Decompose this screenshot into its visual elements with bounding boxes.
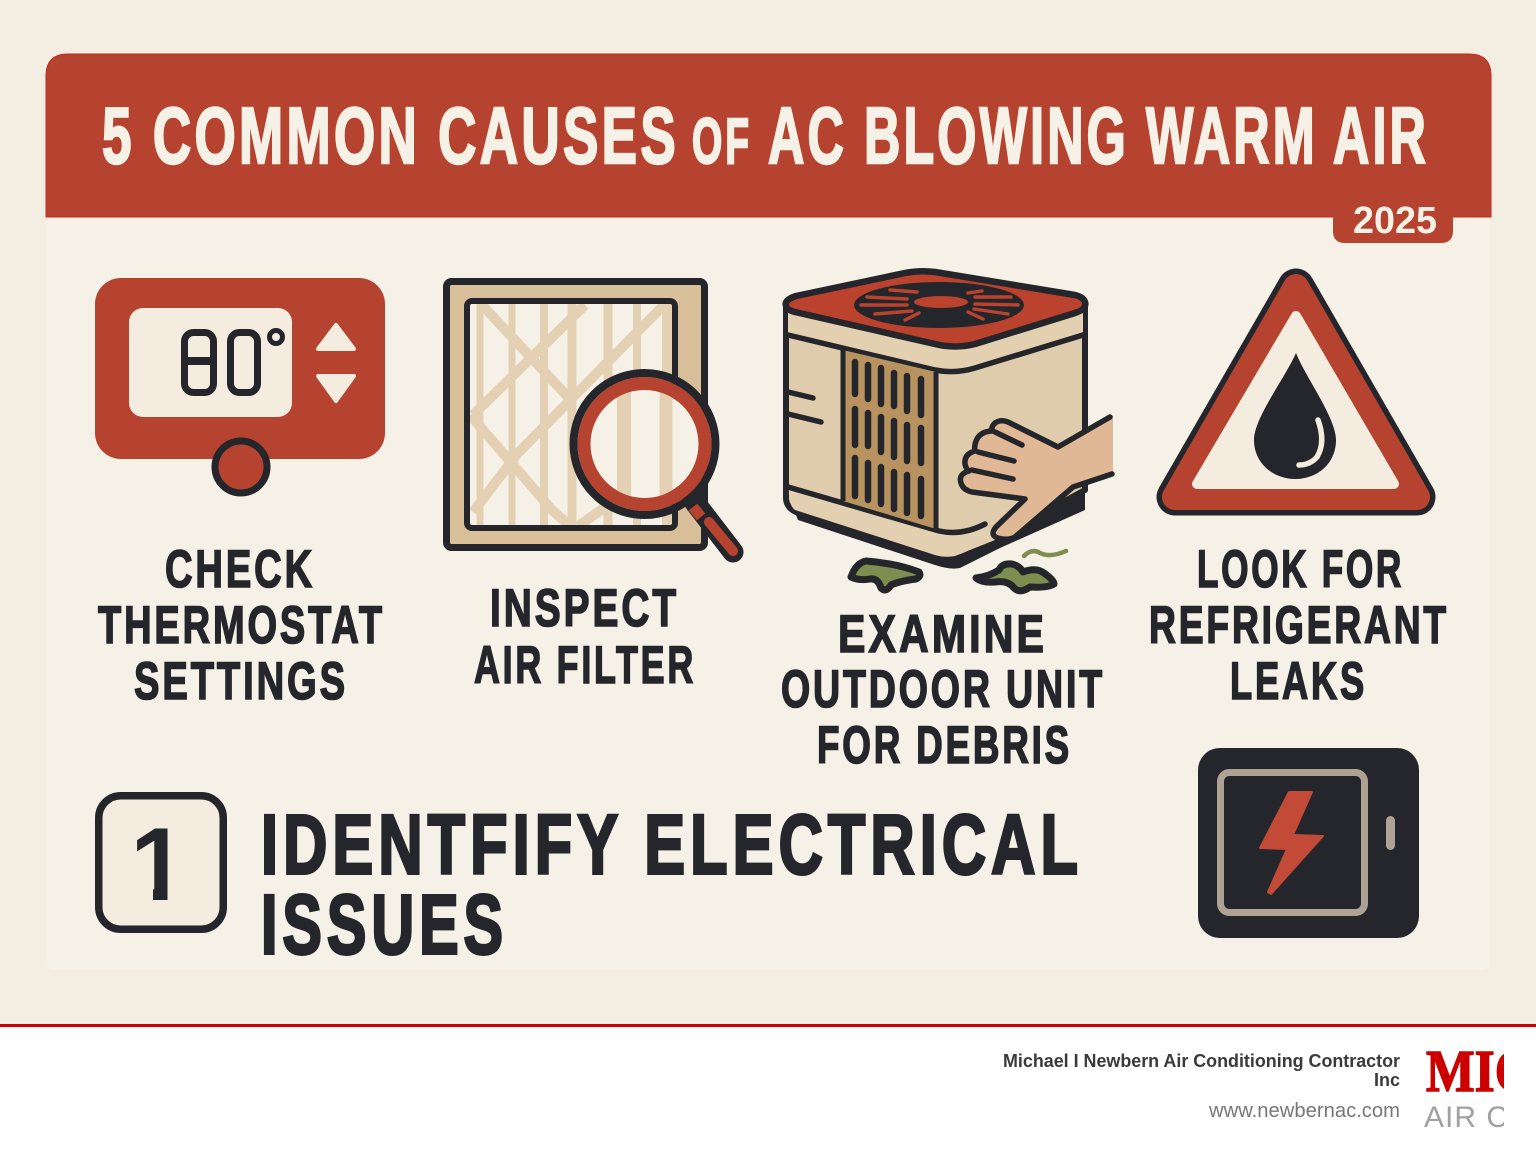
company name: Inc	[1374, 1069, 1400, 1090]
icon: outdoor AC unit with hand and debris	[786, 271, 1113, 591]
icon: electrical panel	[1198, 748, 1419, 938]
top	[786, 271, 1085, 346]
label: examine outdoor unit: EXAMINE	[838, 605, 1047, 664]
title	[102, 91, 1429, 180]
icon: thermostat	[95, 278, 385, 493]
label: check thermostat	[98, 540, 385, 711]
company name	[1003, 1050, 1400, 1090]
logo: AIR C	[1424, 1101, 1509, 1134]
heading: identify electrical issues	[261, 798, 1083, 972]
hand	[960, 416, 1113, 539]
year tab	[1333, 200, 1453, 243]
label: inspect air filter	[474, 579, 696, 695]
title: OF	[692, 105, 752, 177]
header banner	[46, 54, 1491, 217]
label: refrigerant leaks	[1149, 540, 1449, 711]
heading: identify electrical issues: IDENTFIFY ELECTRICAL	[261, 798, 1083, 892]
magnifier	[693, 500, 733, 552]
shadow and base	[790, 487, 1085, 569]
label: inspect air filter: AIR FILTER	[474, 636, 696, 695]
footer	[0, 1024, 1536, 1154]
leaves	[851, 561, 920, 590]
icon: warning triangle with drop	[1175, 287, 1417, 497]
label: examine outdoor unit: OUTDOOR UNIT	[781, 660, 1105, 719]
title: 5 COMMON CAUSES	[102, 91, 679, 180]
label: examine outdoor unit: FOR DEBRIS	[817, 716, 1072, 775]
website: www.newbernac.com	[1208, 1100, 1400, 1122]
heading: identify electrical issues: ISSUES	[261, 878, 508, 972]
label: check thermostat: THERMOSTAT	[98, 596, 385, 655]
panel: main content	[46, 200, 1490, 970]
unit body	[786, 304, 1085, 559]
label: refrigerant leaks: LOOK FOR	[1197, 540, 1404, 599]
label: refrigerant leaks: LEAKS	[1230, 652, 1367, 711]
number badge: 1	[130, 807, 188, 923]
label: inspect air filter: INSPECT	[490, 579, 679, 638]
number badge	[99, 796, 223, 929]
logo	[1424, 1038, 1532, 1134]
company name: Michael I Newbern Air Conditioning Contractor	[1003, 1050, 1400, 1071]
grille	[843, 350, 936, 529]
icon: air filter with magnifier	[446, 282, 733, 552]
label: examine outdoor unit	[781, 605, 1105, 775]
label: check thermostat: CHECK	[165, 540, 315, 599]
label: check thermostat: SETTINGS	[134, 652, 348, 711]
year tab: 2025	[1353, 200, 1437, 242]
